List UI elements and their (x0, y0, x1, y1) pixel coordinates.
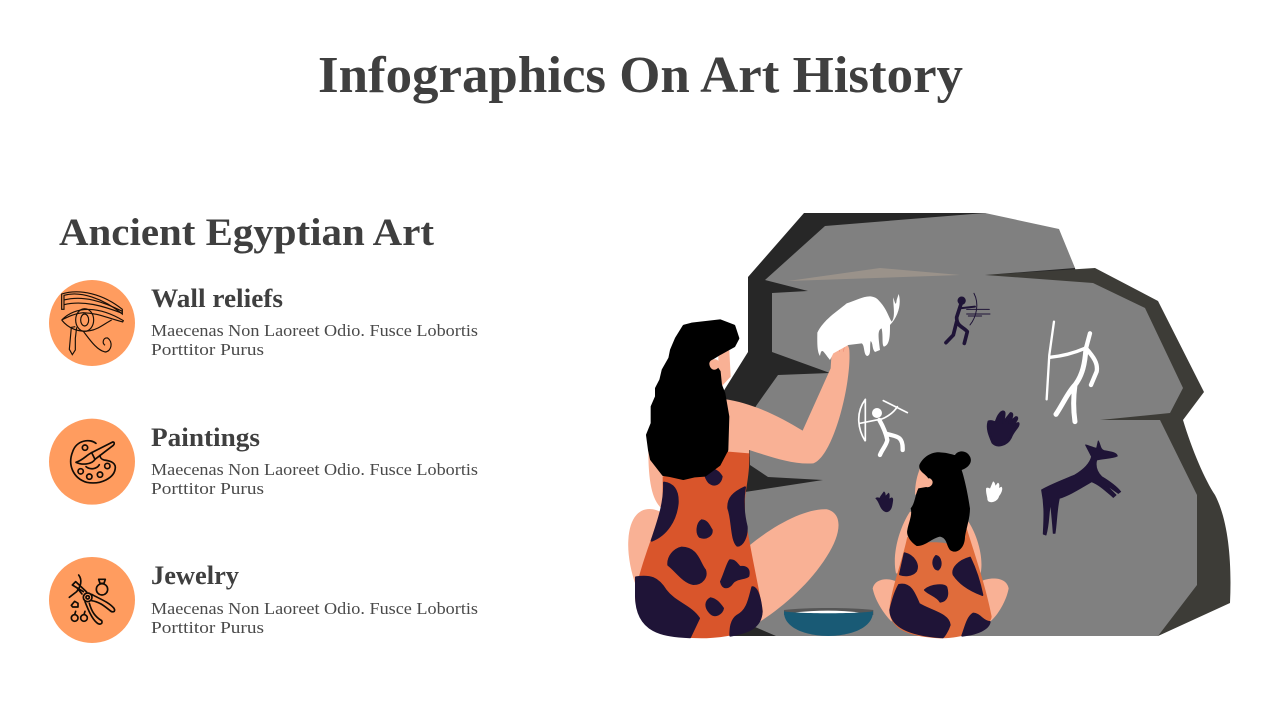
child: dress spots (890, 553, 990, 637)
child: arms and face (895, 468, 981, 573)
rock: highlight (788, 268, 960, 281)
description: Porttitor Purus (151, 479, 264, 498)
heading: Jewelry (151, 561, 239, 590)
description (151, 460, 478, 498)
rock: dark back (723, 213, 1158, 636)
title: Infographics On Art History (318, 47, 963, 104)
child: hair (907, 451, 971, 552)
heading: Paintings (151, 423, 260, 452)
bowl (784, 608, 873, 636)
woman: hair (647, 321, 738, 479)
heading: Wall reliefs (151, 284, 283, 313)
child: dress (889, 528, 992, 638)
painting: mammoth (817, 294, 900, 360)
description: Maecenas Non Laoreet Odio. Fusce Lobortis (151, 460, 478, 479)
painting: spear figure white (1047, 322, 1097, 422)
icon: palette (49, 419, 135, 505)
rock: grey face (745, 213, 1197, 636)
child: legs (873, 578, 1009, 622)
description (151, 321, 478, 359)
child (873, 451, 1009, 638)
woman: ear (709, 359, 719, 370)
description: Porttitor Purus (151, 618, 264, 637)
painting: archer white (859, 399, 907, 455)
section heading: Ancient Egyptian Art (59, 211, 434, 254)
child: ear (925, 478, 933, 487)
description (151, 599, 478, 637)
illustration: cave painting scene (628, 213, 1230, 638)
painting: hunter dark (946, 293, 990, 343)
description: Maecenas Non Laoreet Odio. Fusce Lobortis (151, 321, 478, 340)
list item: paintings (49, 419, 478, 505)
woman: dress spots (636, 468, 762, 637)
painting: hand white (987, 482, 1002, 502)
cave paintings (817, 293, 1121, 535)
woman: fingers (835, 342, 845, 352)
rock: right edge (985, 268, 1230, 636)
woman: legs (628, 509, 839, 622)
icon: pliers and jewels (49, 557, 135, 643)
woman: arm and skin (648, 342, 850, 508)
icon: eye of horus (49, 280, 135, 366)
woman (628, 321, 850, 638)
description: Maecenas Non Laoreet Odio. Fusce Lobortis (151, 599, 478, 618)
painting: deer (1042, 441, 1121, 535)
description: Porttitor Purus (151, 340, 264, 359)
list item: jewelry (49, 557, 478, 643)
painting: hand dark large (988, 412, 1018, 445)
list item: wall reliefs (49, 280, 478, 366)
woman: dress (635, 452, 763, 638)
painting: hand dark small (876, 492, 893, 512)
